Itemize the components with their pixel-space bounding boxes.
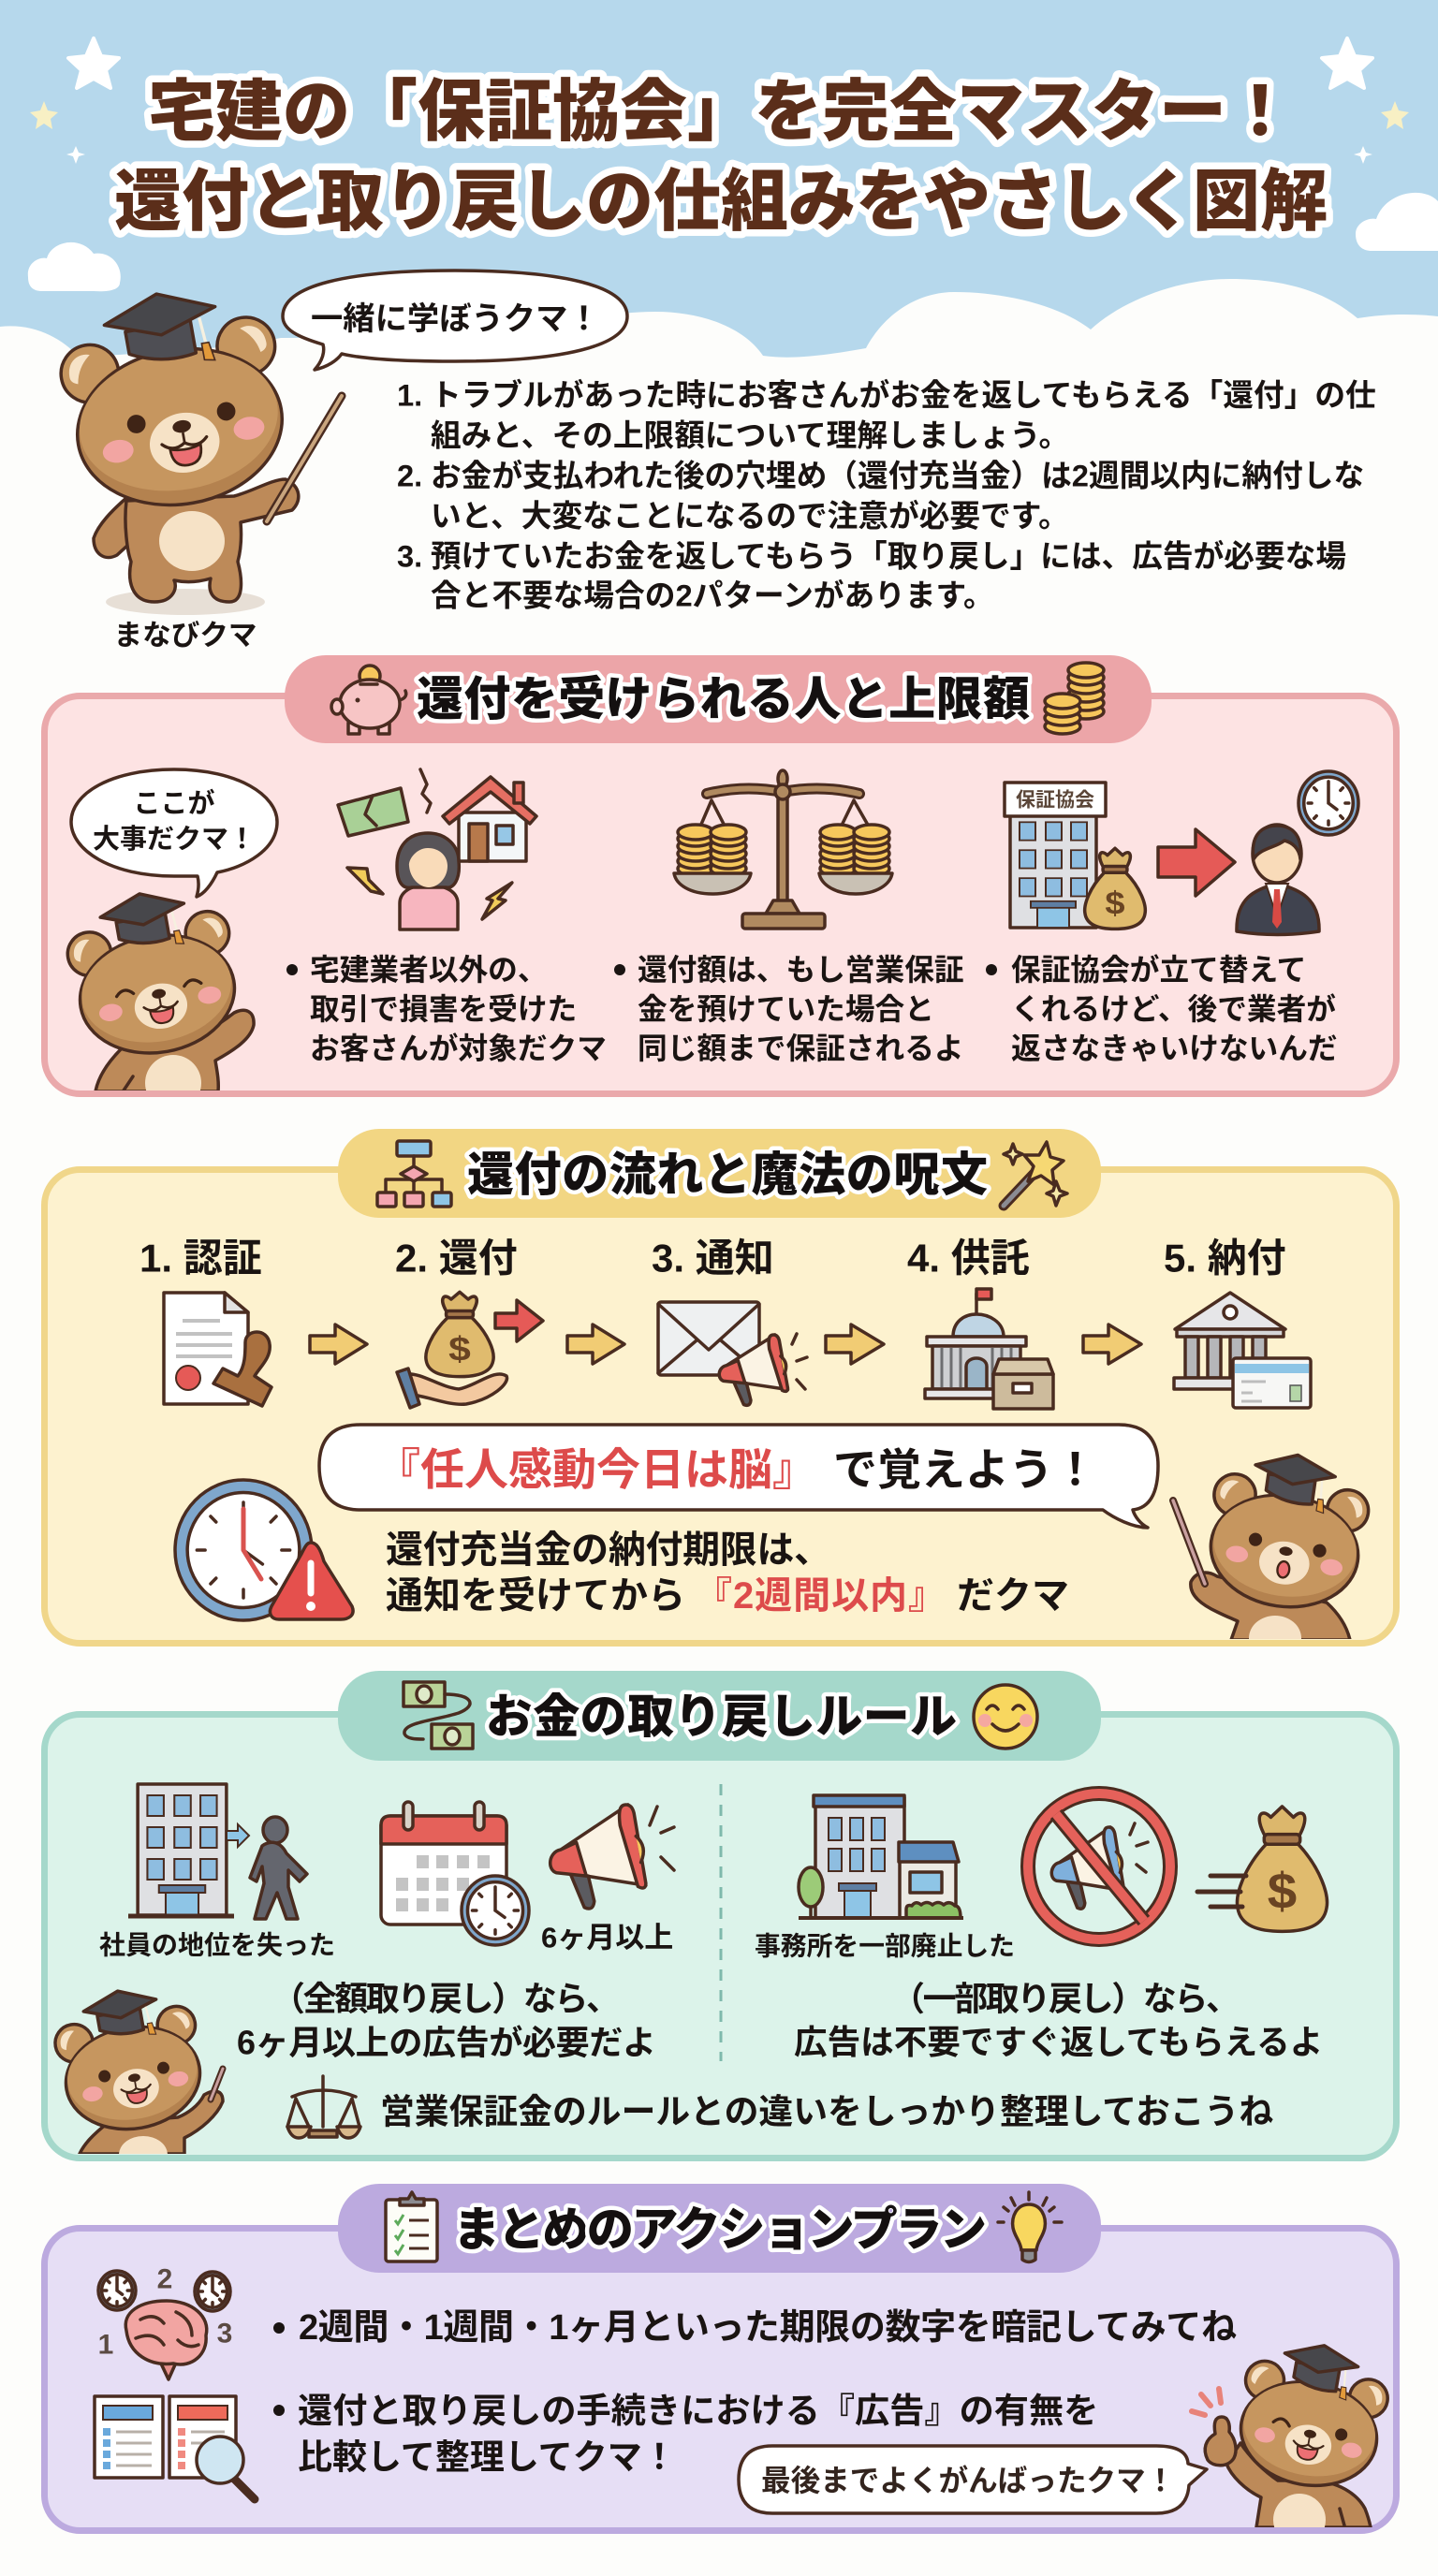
text: payment deadline: 還付充当金の納付期限は、: [386, 1530, 831, 1571]
icon: gold coin stacks: [1045, 663, 1104, 734]
speech bubble: learn together: 一緒に学ぼうクマ！: [311, 301, 600, 337]
intro list: 組みと、その上限額について理解しましょう。: [431, 417, 1069, 453]
text: compare advertising: [273, 2391, 1098, 2477]
mascot: waving bear: [66, 892, 256, 1090]
text: association repayment: 保証協会が立て替えて: [1011, 953, 1306, 987]
speech bubble: well done: 最後までよくがんばったクマ！: [761, 2464, 1175, 2497]
text: memorize deadlines: 2週間・1週間・1ヶ月といった期限の数字を暗記してみてね: [299, 2308, 1237, 2348]
text: partial withdrawal: [794, 1979, 1323, 2061]
header pill: refund flow: [338, 1129, 1101, 1218]
step labels: 2. 還付: [395, 1236, 518, 1281]
icon: emphasis ticks: [1192, 2389, 1221, 2415]
intro list: 2.: [397, 459, 422, 492]
header pill: refund recipients: [285, 655, 1152, 743]
arrow: [310, 1325, 367, 1364]
icon: bank and payment card: [1174, 1293, 1311, 1408]
icon: building and leaving employee: [128, 1784, 307, 1919]
text: association repayment: 返さなきゃいけないんだ: [1011, 1032, 1338, 1065]
title: [114, 75, 1328, 240]
text: full withdrawal: （全額取り戻し）なら、: [271, 1979, 620, 2018]
text: partial withdrawal: （一部取り戻し）なら、: [891, 1979, 1240, 2018]
text: compare with deposit rules: 営業保証金のルールとの違いをしっかり整理しておこうね: [380, 2093, 1273, 2130]
label: six months or more: 6ヶ月以上: [541, 1921, 673, 1954]
text: compare advertising: 還付と取り戻しの手続きにおける『広告』の有無を: [298, 2391, 1098, 2430]
header pill: withdrawal rules: [338, 1671, 1101, 1761]
icon: piggy bank: [331, 666, 406, 734]
speech bubble: learn together: [283, 271, 627, 370]
intro list: [397, 378, 1376, 612]
intro list: 預けていたお金を返してもらう「取り戻し」には、広告が必要な場: [431, 539, 1346, 573]
header pill: refund recipients: 還付を受けられる人と上限額: [417, 673, 1030, 725]
step labels: 3. 通知: [652, 1236, 774, 1281]
panel: withdrawal rules: [45, 1671, 1397, 2174]
icon: flowchart: [377, 1141, 451, 1207]
icon: lightbulb: [998, 2192, 1062, 2261]
arrow: [1083, 1325, 1141, 1364]
intro list: 合と不要な場合の2パターンがあります。: [431, 578, 994, 612]
icon: smiley face: [974, 1685, 1037, 1749]
text: partial withdrawal: 広告は不要ですぐ返してもらえるよ: [794, 2024, 1323, 2061]
text: refund amount: [614, 953, 964, 1065]
text: association repayment: [986, 953, 1338, 1065]
icon: megaphone advertising: [550, 1805, 674, 1909]
text: refund amount: 同じ額まで保証されるよ: [638, 1032, 964, 1065]
text: eligible customers: 宅建業者以外の、: [310, 953, 547, 987]
intro list: 1.: [397, 378, 422, 412]
header pill: action plan: [338, 2184, 1101, 2273]
icon: checklist: [386, 2192, 437, 2261]
header pill: refund flow: 還付の流れと魔法の呪文: [467, 1149, 988, 1201]
label: office partly closed: 事務所を一部廃止した: [755, 1932, 1015, 1960]
mascot: pointing bear: [1169, 1453, 1371, 1639]
panel: refund recipients and limit: [45, 655, 1397, 1111]
stars and sparkles: [30, 38, 1409, 164]
step labels: 5. 納付: [1164, 1236, 1286, 1281]
panel: refund flow and mnemonic: [45, 1129, 1397, 1661]
intro list: トラブルがあった時にお客さんがお金を返してもらえる「還付」の仕: [431, 378, 1376, 412]
icon: small scale: [287, 2076, 360, 2138]
icon: clock with warning: [175, 1480, 353, 1620]
text: full withdrawal: 6ヶ月以上の広告が必要だよ: [237, 2024, 656, 2061]
icon: envelope and megaphone: [658, 1302, 807, 1405]
icon: balance scale: [674, 770, 892, 929]
intro list: 3.: [397, 539, 422, 573]
icon: money bag and hand: [397, 1292, 543, 1408]
divider: [719, 1784, 723, 2061]
text: compare advertising: 比較して整理してクマ！: [298, 2437, 677, 2477]
text: eligible customers: お客さんが対象だクマ: [310, 1032, 607, 1065]
speech bubble: mnemonic: [319, 1425, 1158, 1528]
mascot: bear with pointer: [53, 1989, 227, 2154]
icon: office partially closed: [799, 1795, 963, 1918]
speech bubble: important: ここが: [133, 787, 215, 819]
icon: deposit office and box: [925, 1289, 1053, 1409]
text: association repayment: くれるけど、後で業者が: [1011, 992, 1336, 1026]
icon: no advertising sign: [1028, 1793, 1170, 1939]
icon: brain with clocks and numbers: [98, 2263, 232, 2379]
step labels: 1. 認証: [139, 1236, 262, 1281]
mascot name: まなびクマ: [114, 620, 257, 651]
icon: money transfer: [404, 1682, 473, 1749]
speech bubble: well done: [739, 2446, 1207, 2513]
icon: calendar with clock: [381, 1802, 529, 1945]
mascot: manabi bear: [50, 275, 342, 615]
intro list: お金が支払われた後の穴埋め（還付充当金）は2週間以内に納付しな: [431, 459, 1364, 492]
icon: brain with clocks and numbers: 3: [217, 2318, 232, 2349]
text: refund amount: 金を預けていた場合と: [638, 992, 934, 1026]
mascot: thumbs up bear: [1203, 2344, 1389, 2527]
text: payment deadline: [386, 1530, 1069, 1617]
speech bubble: mnemonic: で覚えよう！: [833, 1445, 1097, 1494]
title: 還付と取り戻しの仕組みをやさしく図解: [114, 165, 1328, 240]
speech bubble: mnemonic: 『任人感動今日は脳』: [376, 1445, 816, 1494]
icon: certification document and stamp: [164, 1293, 271, 1406]
panel: summary action plan: [45, 2184, 1397, 2546]
icon: brain with clocks and numbers: 1: [98, 2329, 113, 2361]
icon: association pays then agent repays: [1005, 771, 1358, 934]
arrow: [567, 1325, 624, 1364]
speech bubble: important: [71, 769, 277, 897]
text: payment deadline: だクマ: [957, 1575, 1069, 1617]
text: refund amount: 還付額は、もし営業保証: [638, 953, 964, 987]
text: payment deadline: 通知を受けてから: [386, 1575, 685, 1617]
step labels: 4. 供託: [907, 1236, 1030, 1281]
header pill: withdrawal rules: お金の取り戻しルール: [486, 1690, 957, 1743]
text: eligible customers: [286, 953, 607, 1065]
step labels: [139, 1236, 1286, 1281]
text: full withdrawal: [237, 1979, 656, 2061]
label: lost employee status: 社員の地位を失った: [99, 1930, 335, 1960]
speech bubble: important: 大事だクマ！: [93, 824, 256, 855]
icon: comparison sheets with magnifier: [95, 2396, 255, 2499]
title: 宅建の「保証協会」を完全マスター！: [148, 75, 1294, 150]
icon: brain with clocks and numbers: 2: [157, 2263, 172, 2295]
arrow: [826, 1325, 884, 1364]
header pill: action plan: まとめのアクションプラン: [453, 2203, 987, 2256]
text: payment deadline: 『2週間以内』: [695, 1575, 946, 1617]
icon: magic wand: [1004, 1142, 1067, 1206]
intro list: いと、大変なことになるので注意が必要です。: [431, 498, 1069, 534]
icon: money bag returning fast: [1197, 1807, 1327, 1931]
icon: customer with damaged money and house: [338, 769, 536, 929]
icon: association pays then agent repays: 保証協会: [1016, 790, 1094, 811]
text: eligible customers: 取引で損害を受けた: [310, 992, 577, 1026]
